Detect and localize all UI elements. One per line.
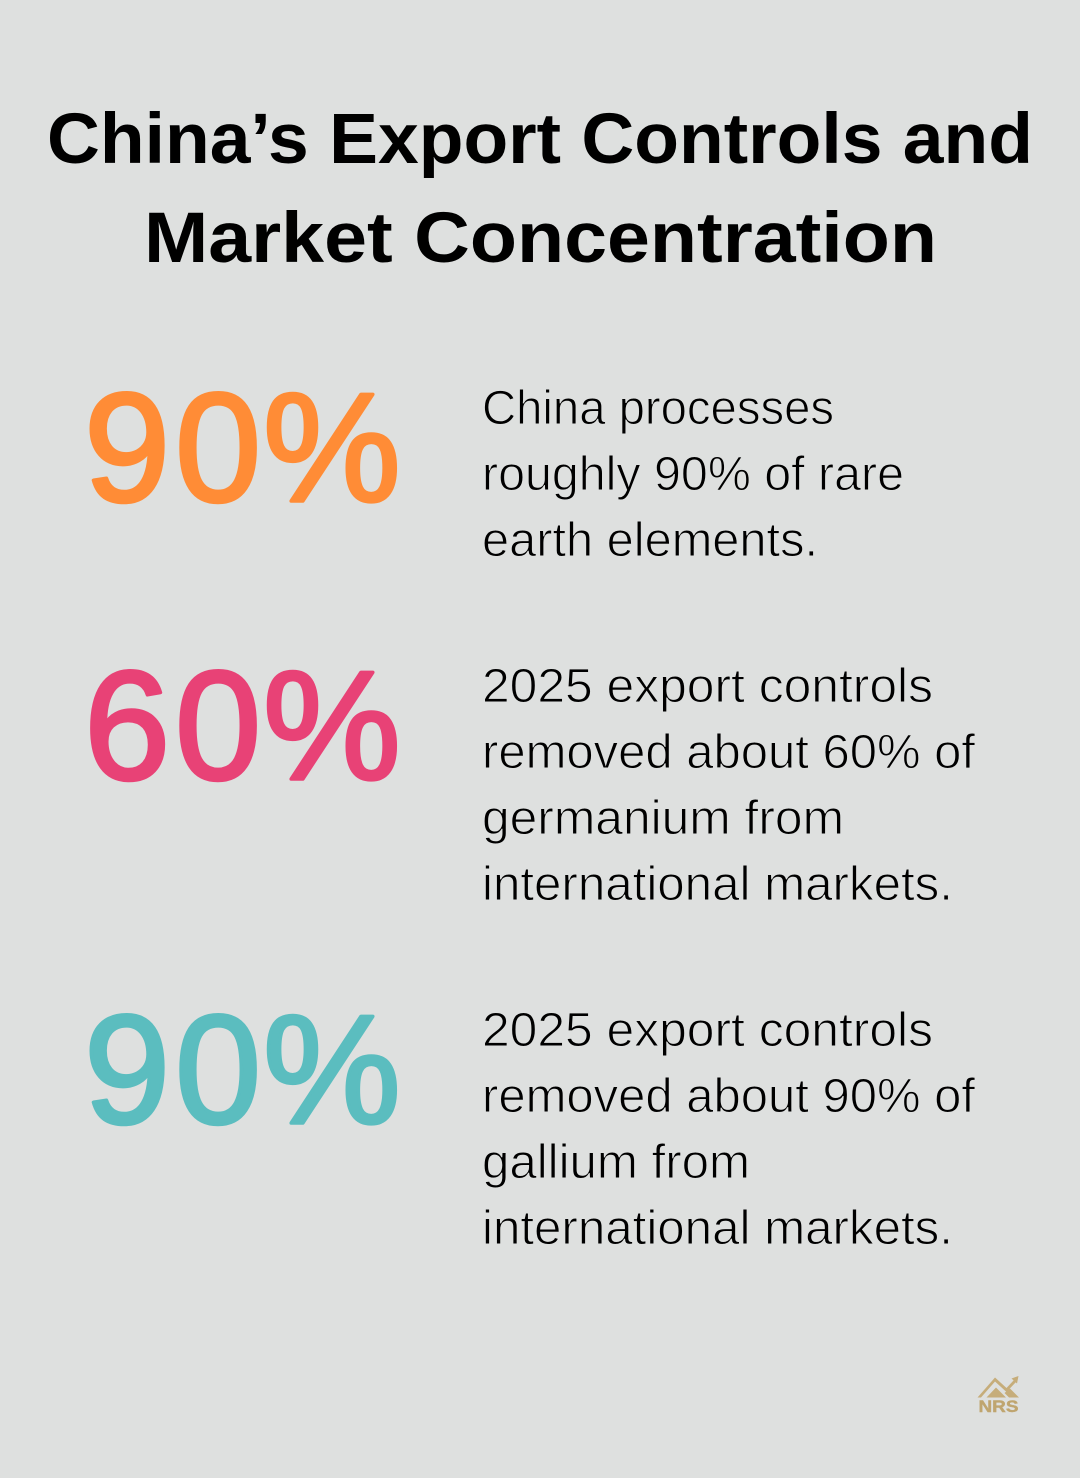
text: germanium description: germanium from [482, 791, 844, 845]
text: gallium description: international markets. [482, 1201, 953, 1255]
text: germanium description [482, 659, 976, 911]
number: 90% teal: 90% [84, 983, 401, 1156]
number: 60% pink: 60% [84, 639, 401, 812]
text: rare earth description: China processes [482, 381, 834, 435]
text: rare earth description [482, 381, 904, 567]
text: rare earth description: earth elements. [482, 513, 818, 567]
text: gallium description: removed about 90% of [482, 1069, 976, 1123]
number: 90% orange: 90% [84, 361, 401, 534]
icon: mountains with rising arrow [978, 1376, 1019, 1398]
text: germanium description: international markets. [482, 857, 953, 911]
title: Market Concentration [144, 199, 937, 278]
title: China’s Export Controls and [47, 100, 1033, 179]
text: gallium description: gallium from [482, 1135, 750, 1189]
text: rare earth description: roughly 90% of rare [482, 447, 904, 501]
logo wordmark: NRS [978, 1398, 1018, 1416]
text: gallium description [482, 1003, 976, 1255]
stat: 60% germanium [84, 639, 976, 911]
stat: 90% rare earth [84, 361, 904, 567]
stat: 90% gallium [84, 983, 976, 1255]
text: germanium description: removed about 60% of [482, 725, 976, 779]
text: gallium description: 2025 export controls [482, 1003, 933, 1057]
text: germanium description: 2025 export controls [482, 659, 933, 713]
logo: NRS [978, 1376, 1019, 1416]
title [47, 100, 1033, 278]
